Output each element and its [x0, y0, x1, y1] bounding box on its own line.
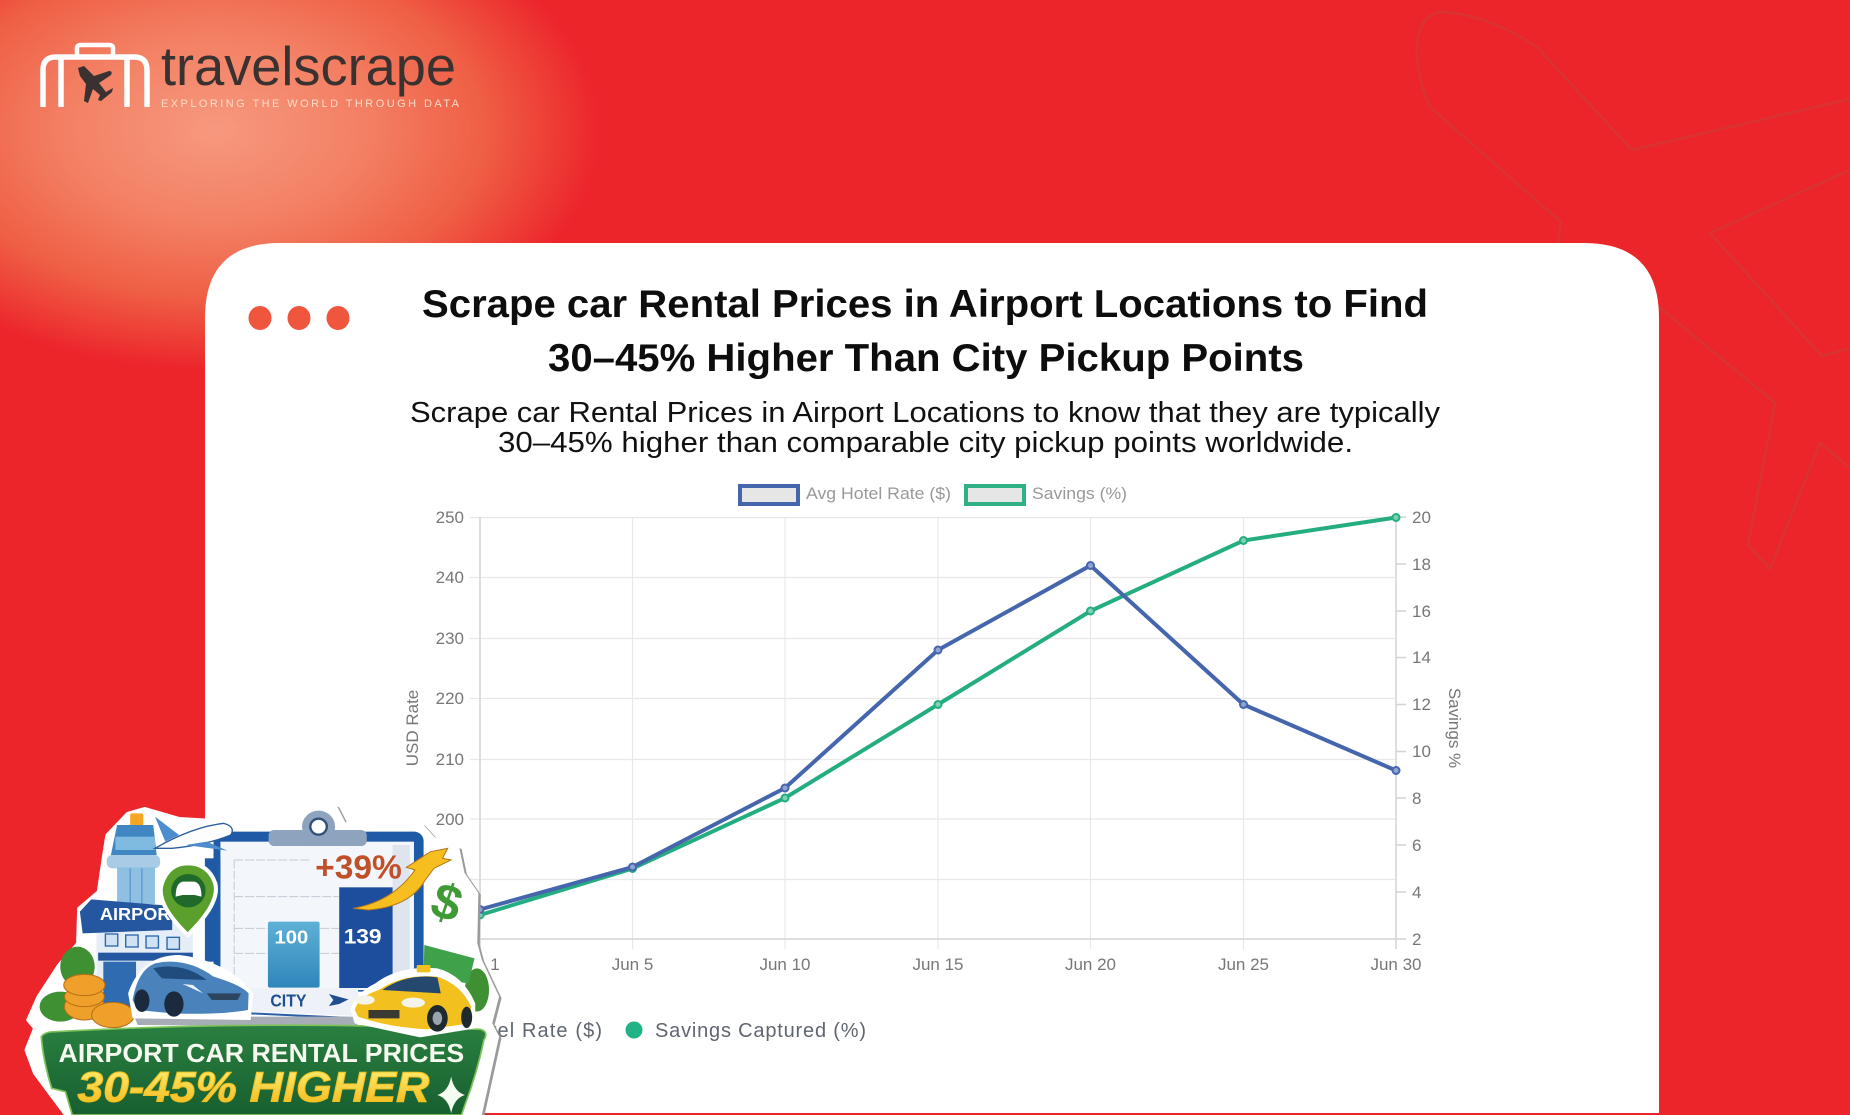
- window dots: [248, 306, 350, 330]
- right axis labels: 2: [1412, 930, 1421, 949]
- subtitle: Scrape car Rental Prices in Airport Locations to know that they are typically: [410, 397, 1441, 429]
- icon: yellow taxi: [351, 965, 475, 1037]
- bar: city 100: [268, 922, 320, 988]
- x axis labels: Jun 10: [759, 955, 811, 974]
- green banner: [41, 1025, 486, 1115]
- right axis labels: 10: [1412, 742, 1431, 761]
- bar: city 100: 100: [274, 928, 308, 948]
- left axis labels: 200: [436, 810, 464, 829]
- banner line 1: AIRPORT CAR RENTAL PRICES: [59, 1038, 464, 1068]
- x axis labels: Jun 30: [1370, 955, 1422, 974]
- banner line 2: 30-45% HIGHER: [77, 1064, 430, 1111]
- bottom legend: Avg Hotel Rate ($): [419, 1020, 602, 1042]
- icon: plane: [155, 817, 232, 851]
- right axis labels: 4: [1412, 883, 1421, 902]
- right axis labels: 8: [1412, 789, 1421, 808]
- right axis labels: [1412, 508, 1431, 949]
- subtitle: [410, 397, 1441, 459]
- logo tagline: EXPLORING THE WORLD THROUGH DATA: [161, 98, 460, 110]
- right axis labels: 12: [1412, 695, 1431, 714]
- title: Scrape car Rental Prices in Airport Locations to Find: [422, 283, 1428, 326]
- bar: airport 139: [339, 887, 393, 988]
- chart legend: [740, 484, 1127, 504]
- background plane outline: [1417, 12, 1850, 569]
- left axis labels: 240: [436, 568, 464, 587]
- bar: airport 139: 139: [344, 925, 382, 948]
- icon: control tower: [107, 813, 160, 904]
- line chart: [403, 508, 1464, 974]
- x axis labels: [490, 955, 1422, 974]
- icon: suitcase with plane: [43, 45, 147, 107]
- series: savings: [476, 514, 1400, 918]
- city strip: [250, 988, 358, 1018]
- clipboard: [205, 811, 424, 992]
- icon: coins: [64, 974, 134, 1028]
- right axis labels: 16: [1412, 602, 1431, 621]
- chart legend: Avg Hotel Rate ($): [806, 484, 951, 503]
- city strip: CITY: [270, 990, 307, 1011]
- icon: map pin: [161, 863, 216, 935]
- bottom legend: Savings Captured (%): [655, 1020, 866, 1042]
- sticker shadow: [28, 805, 500, 1115]
- right axis labels: 14: [1412, 648, 1431, 667]
- +39% label: +39%: [315, 849, 402, 886]
- panel: white card: [205, 243, 1659, 1113]
- left axis labels: 230: [436, 629, 464, 648]
- title: [422, 283, 1428, 380]
- icon: up arrow: [353, 848, 451, 910]
- series: hotel rate: [476, 562, 1400, 913]
- sticker badge: [24, 806, 502, 1115]
- title: 30–45% Higher Than City Pickup Points: [548, 337, 1304, 380]
- chart legend: Savings (%): [1032, 484, 1127, 503]
- icon: sparkle: [437, 1077, 465, 1113]
- left axis labels: 220: [436, 689, 464, 708]
- icon: airport building: [80, 899, 193, 1010]
- bushes: [40, 947, 489, 1022]
- icon: blue car: [128, 955, 253, 1020]
- sticker outline: [26, 803, 498, 1115]
- logo wordmark: travelscrape: [161, 35, 456, 97]
- subtitle: 30–45% higher than comparable city pickup points worldwide.: [498, 427, 1353, 459]
- left axis labels: 210: [436, 750, 464, 769]
- right axis labels: 20: [1412, 508, 1431, 527]
- bottom legend: [419, 1020, 866, 1042]
- x axis labels: Jun 15: [912, 955, 964, 974]
- logo: [43, 35, 460, 110]
- x axis labels: Jun 25: [1218, 955, 1269, 974]
- x axis labels: Jun 5: [612, 955, 653, 974]
- grid lines: [470, 517, 1396, 949]
- x axis labels: Jun 20: [1065, 955, 1116, 974]
- left axis labels: 250: [436, 508, 464, 527]
- left axis labels: [436, 508, 464, 829]
- icon: airport building: AIRPOR: [100, 904, 171, 924]
- icon: dollar: $: [424, 871, 469, 933]
- grey road: [134, 1017, 358, 1027]
- left axis title: USD Rate: [403, 690, 422, 766]
- right axis labels: 6: [1412, 836, 1421, 855]
- x axis labels: 1: [490, 955, 500, 974]
- right axis title: Savings %: [1445, 688, 1464, 768]
- cash: [424, 945, 475, 983]
- right axis labels: 18: [1412, 555, 1431, 574]
